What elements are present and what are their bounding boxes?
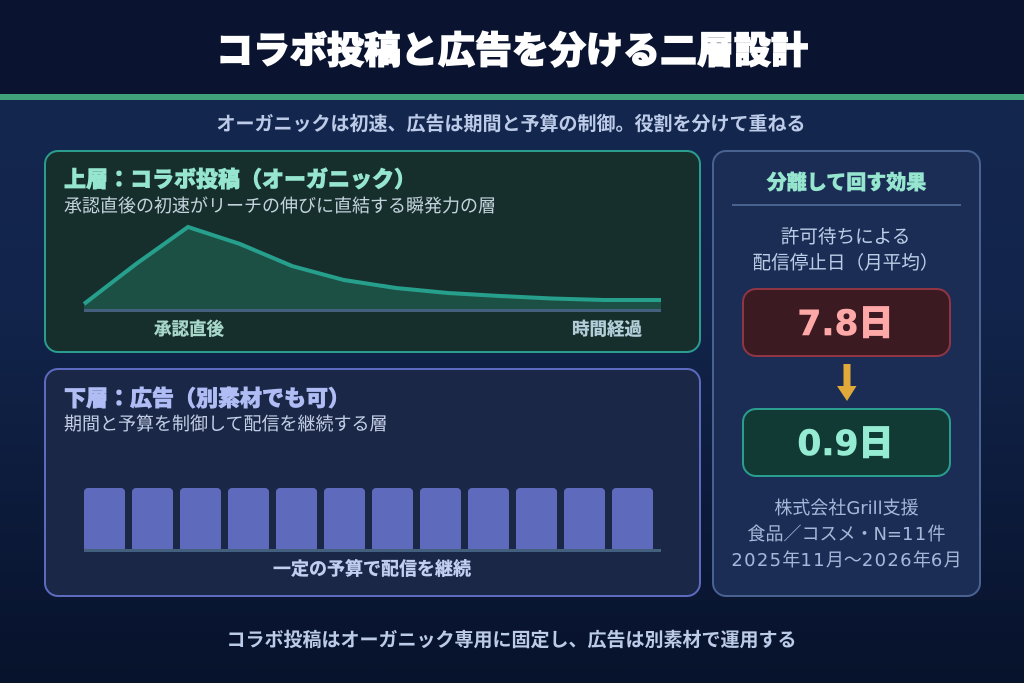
subtitle: オーガニックは初速、広告は期間と予算の制御。役割を分けて重ねる bbox=[216, 109, 806, 136]
footer message: コラボ投稿はオーガニック専用に固定し、広告は別素材で運用する bbox=[226, 625, 796, 652]
axis label: end: 時間経過 bbox=[572, 316, 642, 341]
source note: 食品／コスメ・N=11件 bbox=[747, 520, 946, 546]
panel: effect bbox=[712, 150, 981, 597]
before value: 7.8日 bbox=[797, 295, 894, 346]
metric label: 許可待ちによる bbox=[781, 222, 910, 249]
metric label bbox=[753, 222, 938, 275]
after value box bbox=[742, 408, 951, 477]
divider bbox=[732, 204, 961, 206]
lower layer description: 期間と予算を制御して配信を継続する層 bbox=[64, 410, 387, 436]
lower layer heading: 下層：広告（別素材でも可） bbox=[64, 381, 350, 413]
bar chart: steady spend bbox=[84, 488, 661, 552]
metric label: 配信停止日（月平均） bbox=[753, 248, 938, 275]
arrow: down bbox=[837, 364, 856, 401]
source note: 株式会社Grill支援 bbox=[774, 494, 919, 520]
effect heading: 分離して回す効果 bbox=[767, 166, 926, 195]
source note bbox=[731, 494, 962, 572]
panel: upper layer bbox=[44, 150, 701, 353]
source note: 2025年11月〜2026年6月 bbox=[731, 546, 962, 572]
header band bbox=[0, 0, 1024, 94]
axis label: start: 承認直後 bbox=[154, 316, 224, 341]
upper layer description: 承認直後の初速がリーチの伸びに直結する瞬発力の層 bbox=[64, 192, 496, 218]
header accent bar bbox=[0, 94, 1024, 100]
after value: 0.9日 bbox=[797, 415, 894, 466]
area chart: reach decay bbox=[82, 224, 661, 312]
bar chart caption: 一定の予算で配信を継続 bbox=[273, 555, 471, 581]
title: コラボ投稿と広告を分ける二層設計 bbox=[216, 20, 808, 74]
before value box bbox=[742, 288, 951, 357]
upper layer heading: 上層：コラボ投稿（オーガニック） bbox=[64, 162, 416, 194]
panel: lower layer bbox=[44, 368, 701, 597]
